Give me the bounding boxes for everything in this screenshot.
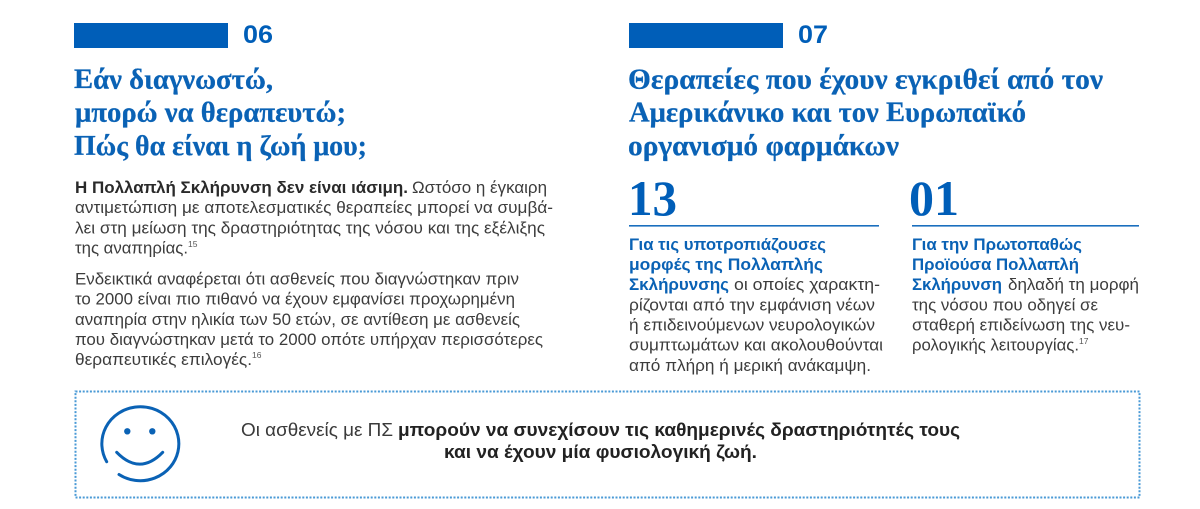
description: primary progressive form: Προϊούσα Πολλαπλή bbox=[912, 256, 1079, 274]
description: relapsing forms: από πλήρη ή μερική ανάκαμψη. bbox=[629, 357, 871, 375]
heading: section 07: Θεραπείες που έχουν εγκριθεί από τον bbox=[628, 64, 1104, 96]
description: primary progressive form: Για την Πρωτοπαθώς bbox=[912, 236, 1082, 254]
text block: diagnosis before and after 2000: που διαγνώστηκαν μετά το 2000 οπότε υπήρχαν περισσότερες bbox=[75, 331, 543, 349]
number 13: 13 bbox=[628, 170, 677, 226]
dotted callout border bbox=[76, 392, 1140, 498]
text block: not curable paragraph: Η Πολλαπλή Σκλήρυνση δεν είναι ιάσιμη. bbox=[75, 179, 408, 197]
callout message: Οι ασθενείς με ΠΣ bbox=[241, 419, 393, 440]
description: relapsing forms: ή επιδεινούμενων νευρολογικών bbox=[629, 316, 875, 334]
text block: not curable paragraph: 15 bbox=[188, 239, 198, 249]
heading: section 07: οργανισμό φαρμάκων bbox=[628, 131, 900, 162]
panel: callout bbox=[76, 392, 1140, 498]
description: primary progressive form: Σκλήρυνση bbox=[912, 276, 1002, 294]
panel: section 07 bbox=[628, 21, 1139, 375]
stat: 01 primary progressive form bbox=[909, 170, 1139, 354]
heading: section 06 bbox=[74, 64, 367, 162]
text block: not curable paragraph: λει στη μείωση της δραστηριότητας της νόσου και της εξέλιξης bbox=[75, 220, 545, 238]
description: primary progressive form bbox=[912, 236, 1139, 354]
description: relapsing forms: συμπτωμάτων και ακολουθούνται bbox=[629, 336, 883, 354]
callout message bbox=[241, 419, 960, 463]
description: primary progressive form: σταθερή επιδείνωση της νευ- bbox=[912, 316, 1130, 334]
heading: section 07 bbox=[628, 64, 1104, 162]
icon: smiley face bbox=[102, 407, 179, 481]
text block: not curable paragraph bbox=[75, 179, 553, 258]
description: primary progressive form: δηλαδή τη μορφή bbox=[1008, 276, 1139, 294]
panel: section 06 bbox=[74, 21, 553, 369]
text block: not curable paragraph: Ωστόσο η έγκαιρη bbox=[412, 179, 547, 197]
description: primary progressive form: της νόσου που οδηγεί σε bbox=[912, 296, 1099, 314]
text block: diagnosis before and after 2000: Ενδεικτικά αναφέρεται ότι ασθενείς που διαγνώστηκαν πριν bbox=[75, 270, 519, 288]
heading: section 06: Πώς θα είναι η ζωή μου; bbox=[74, 131, 367, 162]
rule under 01 bbox=[912, 225, 1139, 227]
rule under 13 bbox=[629, 225, 879, 227]
text block: diagnosis before and after 2000: το 2000 είναι πιο πιθανό να έχουν εμφανίσει προχωρημένη bbox=[75, 290, 515, 308]
description: relapsing forms bbox=[629, 236, 883, 375]
heading: section 07: Αμερικάνικο και τον Ευρωπαϊκό bbox=[629, 98, 1026, 128]
heading: section 06: Εάν διαγνωστώ, bbox=[74, 64, 273, 96]
description: relapsing forms: Σκλήρυνσης bbox=[629, 276, 729, 294]
text block: diagnosis before and after 2000: θεραπευτικές επιλογές. bbox=[75, 351, 252, 369]
heading: section 06: μπορώ να θεραπευτώ; bbox=[75, 98, 346, 128]
text block: diagnosis before and after 2000 bbox=[75, 270, 543, 369]
description: primary progressive form: 17 bbox=[1079, 336, 1089, 346]
number 01: 01 bbox=[909, 170, 959, 226]
description: relapsing forms: ρίζονται από την εμφάνιση νέων bbox=[629, 296, 875, 314]
description: relapsing forms: οι οποίες χαρακτη- bbox=[734, 276, 880, 294]
callout message: και να έχουν μία φυσιολογική ζωή. bbox=[444, 441, 757, 463]
description: relapsing forms: Για τις υποτροπιάζουσες bbox=[629, 236, 826, 254]
callout message: μπορούν να συνεχίσουν τις καθημερινές δραστηριότητές τους bbox=[398, 419, 960, 440]
stat: 13 relapsing forms bbox=[628, 170, 883, 375]
section number 06: 06 bbox=[243, 21, 273, 49]
section number 07: 07 bbox=[798, 21, 828, 49]
description: relapsing forms: μορφές της Πολλαπλής bbox=[629, 256, 823, 274]
description: primary progressive form: ρολογικής λειτουργίας. bbox=[912, 336, 1079, 354]
text block: not curable paragraph: της αναπηρίας. bbox=[75, 240, 188, 258]
section 06 bar bbox=[74, 23, 228, 48]
text block: diagnosis before and after 2000: 16 bbox=[252, 350, 262, 360]
section 07 bar bbox=[629, 23, 783, 48]
text block: diagnosis before and after 2000: αναπηρία στην ηλικία των 50 ετών, σε αντίθεση με ασθενείς bbox=[75, 311, 520, 329]
text block: not curable paragraph: αντιμετώπιση με αποτελεσματικές θεραπείες μπορεί να συμβά- bbox=[75, 199, 553, 217]
